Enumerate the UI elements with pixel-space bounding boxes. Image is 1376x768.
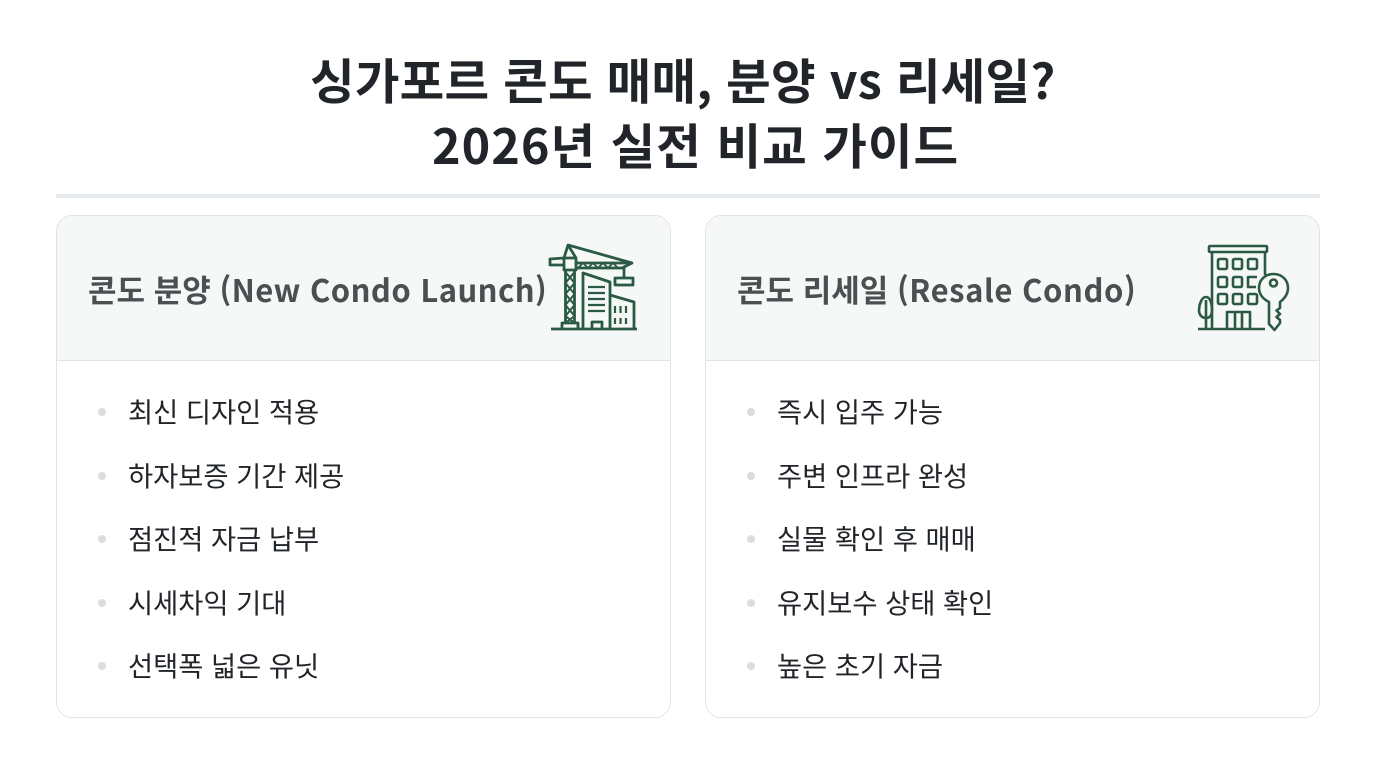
list item: inspect before buying: 실물 확인 후 매매 bbox=[777, 517, 976, 557]
heading: new condo launch: 콘도 분양 (New Condo Launch) bbox=[88, 266, 547, 311]
list item: maintenance check: 유지보수 상태 확인 bbox=[777, 581, 993, 621]
heading: resale condo: 콘도 리세일 (Resale Condo) bbox=[737, 266, 1136, 311]
panel header: new condo launch bbox=[57, 216, 670, 361]
list item: infrastructure: 주변 인프라 완성 bbox=[777, 454, 968, 494]
title bbox=[310, 43, 1056, 178]
list item: progressive payment: 점진적 자금 납부 bbox=[128, 517, 319, 557]
list item: unit choice: 선택폭 넓은 유닛 bbox=[128, 644, 319, 684]
title: 싱가포르 콘도 매매, 분양 vs 리세일? bbox=[310, 43, 1056, 113]
panel: new condo launch bbox=[56, 215, 671, 718]
panel header: resale condo bbox=[706, 216, 1319, 361]
list item: capital gain: 시세차익 기대 bbox=[128, 581, 286, 621]
title: 2026년 실전 비교 가이드 bbox=[432, 108, 959, 178]
list item: latest design: 최신 디자인 적용 bbox=[128, 390, 319, 430]
icon: crane and buildings bbox=[548, 244, 637, 330]
list item: defect warranty: 하자보증 기간 제공 bbox=[128, 454, 344, 494]
panel: resale condo bbox=[705, 215, 1320, 718]
icon: apartment building with key bbox=[1198, 244, 1290, 332]
list item: immediate move-in: 즉시 입주 가능 bbox=[777, 390, 943, 430]
divider bbox=[56, 194, 1320, 198]
list item: high initial funds: 높은 초기 자금 bbox=[777, 644, 943, 684]
